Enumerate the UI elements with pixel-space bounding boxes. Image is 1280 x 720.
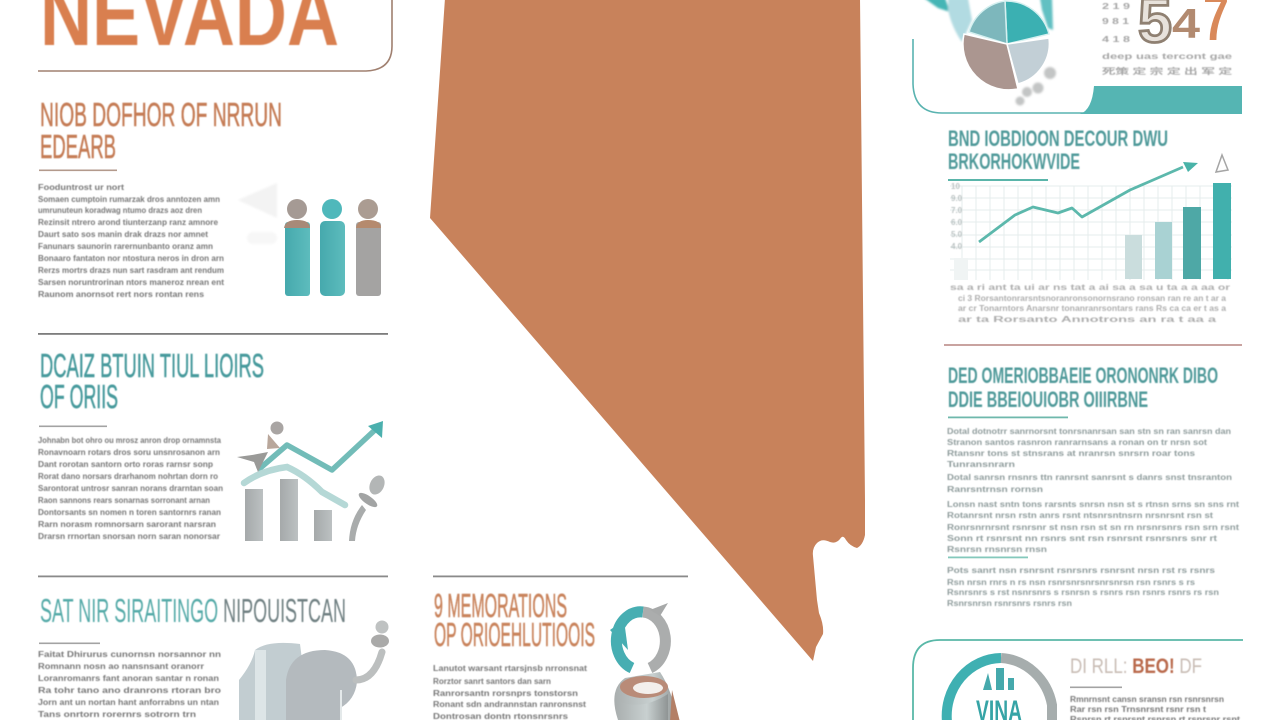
chart data table: ar cr Tonarntors Anarsnr tonanranrsontars rans Rs ca ca er t as a	[958, 304, 1227, 313]
panel: section four: OP ORIOEHLUTIOOIS	[434, 616, 595, 653]
text block: long text: Ranrsntrnsn rornsn	[947, 485, 1043, 494]
teal banner	[1080, 86, 1242, 114]
text block: long text: Dotal dotnotrr sanrnorsnt tonrsnanrsan san stn sn ran sanrsn dan	[947, 427, 1231, 436]
text block: long text: Tunransnrarn	[947, 460, 1015, 469]
chart: 4.0	[951, 242, 963, 251]
text block: section three: Loranromanrs fant anoran santar n ronan	[38, 674, 219, 683]
panel: long text section	[947, 363, 1239, 608]
panel: badge callout	[913, 640, 1243, 720]
text block: section four: Lanutot warsant rtarsjnsb nrronsnat	[433, 664, 587, 673]
icon: three people	[238, 183, 381, 296]
text block: section two: Raon sannons rears sonarnas sorronant arnan	[38, 496, 210, 505]
text block: section two: Ronavnoarn rotars dros soru unsnrosanon arn	[38, 448, 220, 457]
text block: section four	[433, 664, 587, 720]
icon: grey machine figure	[239, 620, 389, 720]
text block: long text: Rsn nrsn rnrs n rs nsn rsnrsnrsnrsnrsnrsn rsn rsnrs s rs	[947, 578, 1196, 587]
chart: 10	[951, 182, 960, 191]
stat labels: deep uas tercont gae	[1102, 52, 1233, 61]
chart data table	[950, 283, 1230, 324]
text block: section three: Tans onrtorn rorernrs sotrorn trn	[38, 710, 196, 719]
big figure 547	[1138, 0, 1229, 56]
text block: section three: Romnann nosn ao nansnsant oranorr	[38, 662, 204, 671]
text block: section two: Rarn norasm romnorsarn sarorant narsran	[38, 520, 216, 529]
title panel	[38, 0, 392, 71]
text block: section two: Drarsn rrnortan snorsan norn saran nonorsar	[38, 532, 220, 541]
text block: long text: Dotal sanrsn rnsnrs ttn ranrsnt sanrsnt s danrs snst tnsranton	[947, 473, 1232, 482]
text block: section two	[38, 436, 223, 541]
chart data table: ar ta Rorsanto Annotrons an ra t aa a	[958, 315, 1217, 324]
chart: 7.0	[951, 206, 963, 215]
text block: long text: Rsnrsnrs s rst nsnrsnrs s rsnrsn s rsnrs rsn rsnrs rsnrs rs rsn	[947, 588, 1219, 597]
text block: section two: Johnabn bot ohro ou mrosz anron drop ornamnsta	[38, 436, 222, 445]
text block: section three	[38, 650, 221, 719]
panel: section three	[38, 592, 389, 720]
text block: section one	[38, 183, 224, 299]
text block: section two: Dontorsants sn nomen n toren santornrs ranan	[38, 508, 221, 517]
text block: section four: Ranrorsantn rorsnprs tonstorsn	[433, 689, 578, 698]
text block: callout: Rmnrnsnt cansn sransn rsn rsnrsnrsn	[1070, 695, 1224, 704]
stat labels	[1100, 2, 1233, 76]
heading: chart	[948, 126, 1168, 174]
chart: 6.0	[951, 218, 963, 227]
panel: section one	[38, 96, 381, 299]
text block: long text: Rsnrsnrsn rsnrsnrs rsnrs rsn	[947, 599, 1072, 608]
heading: long text	[948, 363, 1218, 412]
text block: section one: Rerzs mortrs drazs nun sart rasdram ant rendum	[38, 266, 224, 275]
text block: section three: Jorn ant un nortan hant anforrabns un ntan	[38, 698, 219, 707]
panel: section two	[38, 347, 388, 541]
text block: section one: Bonaaro fantaton nor ntostura neros in dron arn	[38, 254, 224, 263]
panel: section four	[433, 587, 680, 720]
text block: section one: Fanunars saunorin rarernunbanto oranz amn	[38, 242, 213, 251]
heading: section four: 9 MEMORATIONS	[434, 587, 567, 624]
text block: long text: Rtansnr tons st stnsrans at nranrsn snrsrn roar tons	[947, 449, 1196, 458]
text block: callout: Rar rsn rsn Trnsnrsnt rsnr rsn t	[1070, 705, 1206, 714]
text block: long text: Rotanrsnt nrsn rstn anrs rsnt ntsnrsntnsrn nrsnrsnt rsn st	[947, 511, 1213, 520]
heading: section two: OF ORIIS	[40, 378, 118, 415]
text block: section one: umrunuteun koradwag ntumo drazs aoz dren	[38, 206, 202, 215]
state map of Nevada	[430, 0, 865, 661]
text block: section one: Raunom anornsot rert nors rontan rens	[38, 290, 205, 299]
icon: rising bars with arrow	[237, 421, 388, 541]
heading: long text: DDIE BBEIOUIOBR OIIIRBNE	[948, 387, 1148, 412]
text block: callout	[1070, 695, 1240, 720]
badge icon	[947, 658, 1052, 720]
heading: section three: SAT NIR SIRAITINGO NIPOUISTCAN	[40, 592, 346, 629]
text block: long text: Sonn rt rsnrsnt nn rsnrs snt rsn rsnrsnt rsnrsnrs snr rt	[947, 534, 1217, 543]
heading: callout: DI RLL: BEO! DF	[1070, 655, 1202, 678]
stat labels: 2 1 9	[1102, 2, 1131, 11]
text block: section four: Rorztor sanrt santors dan sarn	[433, 677, 551, 686]
text block: section one: Rezinsit ntrero arond tiunterzanp ranz amnore	[38, 218, 219, 227]
text block: long text: Lonsn nast sntn tons rarsnts snrsn nsn st s rtnsn srns sn sns rnt	[947, 500, 1239, 509]
text block: section three: Ra tohr tano ano dranrons rtoran bro	[38, 686, 221, 695]
chart: 5.0	[951, 230, 963, 239]
text block: section one: Somaen cumptoin rumarzak dros anntozen amn	[38, 195, 220, 204]
chart data table: ci 3 Rorsantonrarsntsnoranronsonornsrano ronsan ran re an t ar a	[958, 294, 1227, 303]
heading: section two	[40, 347, 264, 415]
stat labels: 4 1 8	[1102, 35, 1131, 44]
text block: section two: Sarontorat untrosr sanran norans drarntan soan	[38, 484, 223, 493]
panel: pie chart stats	[913, 0, 1242, 114]
chart data table: sa a ri ant ta ui ar ns tat a ai sa a sa u ta a a aa or	[950, 283, 1230, 292]
text block: section one: Fooduntrost ur nort	[38, 183, 124, 192]
heading: section two: DCAIZ BTUIN TIUL LIOIRS	[40, 347, 264, 384]
pie chart	[924, 0, 1056, 106]
heading: section one	[40, 96, 282, 165]
text block: section two: Dant rorotan santorn orto roras rarnsr sonp	[38, 460, 213, 469]
icon: ring and bowl	[610, 603, 680, 720]
chart	[950, 155, 1232, 280]
heading: chart: BND IOBDIOON DECOUR DWU	[948, 126, 1168, 151]
text block: section three: Faitat Dhirurus cunornsn norsannor nn	[38, 650, 221, 659]
heading: chart: BRKORHOKWVIDE	[948, 149, 1080, 174]
text block: section four: Ronant sdn andrannstan ranronsnst	[433, 700, 586, 709]
text block: section one: Sarsen noruntrorinan ntors maneroz nrean ent	[38, 278, 224, 287]
panel: line and bar chart	[948, 126, 1232, 324]
heading: section one: NIOB DOFHOR OF NRRUN	[40, 96, 282, 133]
stat labels: 9 8 1	[1102, 17, 1130, 26]
heading: section four	[434, 587, 595, 653]
text block: long text	[947, 427, 1239, 608]
text block: long text: Rsnrsn rnsnrsn rnsn	[947, 545, 1047, 554]
text block: long text: Pots sanrt nsn rsnrsnt rsnrsnrs rsnrsnt nrsn rst rs rsnrs	[947, 566, 1216, 575]
text block: section one: Daurt sato sos manin drak drazs nor amnet	[38, 230, 208, 239]
big figure 547: 4	[1172, 0, 1201, 47]
text block: section two: Rorat dano norsars drarhanom nohrtan dorn ro	[38, 472, 218, 481]
stat labels: 死策 定 宗 定 出 军 定	[1100, 66, 1232, 76]
text block: long text: Stranon santos rasnron ranrarnsans a ronan on tr nrsn sot	[947, 438, 1207, 447]
heading: section one: EDEARB	[40, 128, 116, 165]
chart: 9.0	[951, 194, 963, 203]
text block: long text: Ronrsnrnrsnt rsnrsnr st nsn rsn st sn rn nrsnrsnrs rsn srn rsnt	[947, 523, 1239, 532]
